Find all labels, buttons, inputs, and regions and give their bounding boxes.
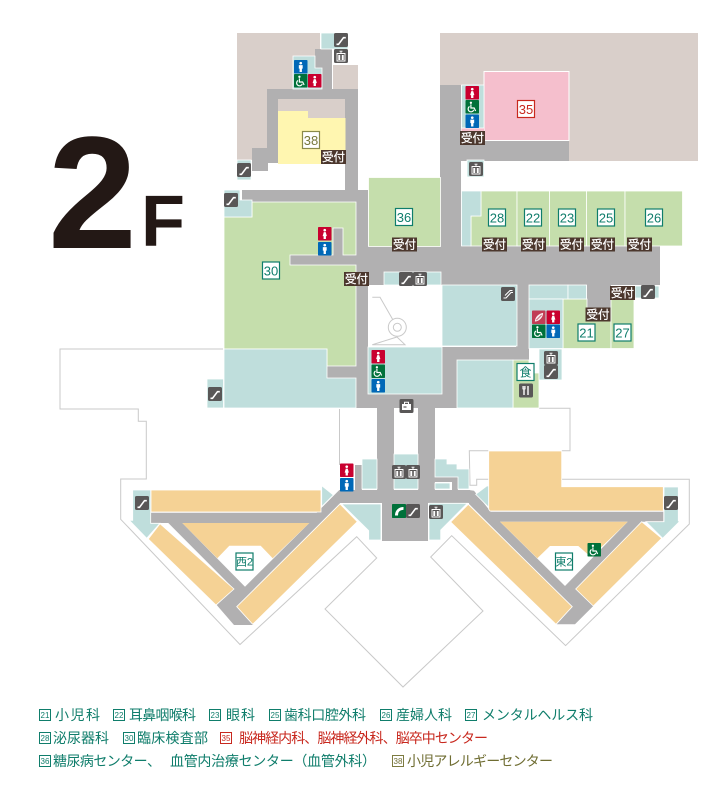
department number boxes: 25 xyxy=(599,210,613,226)
reception labels xyxy=(321,131,652,322)
icons: elevators xyxy=(334,49,558,519)
legend 36 xyxy=(40,753,376,769)
department number boxes: 食 xyxy=(519,366,532,380)
legend 21: 小児科 xyxy=(55,707,100,723)
legend 25: 25 xyxy=(271,711,280,720)
reception labels: 受付 xyxy=(591,238,614,252)
icons: restrooms xyxy=(294,60,601,556)
reception labels: 受付 xyxy=(483,238,506,252)
department number boxes: 21 xyxy=(579,326,594,340)
reception labels: 受付 xyxy=(345,273,368,286)
legend 25: 歯科口腔外科 xyxy=(284,707,366,723)
legend row 3 xyxy=(40,753,553,769)
title: 2F: 2 xyxy=(48,103,137,282)
triangles inside the wards xyxy=(182,522,628,587)
department number boxes: 38 xyxy=(304,133,318,148)
legend 38: 38 xyxy=(394,757,403,766)
reception labels: 受付 xyxy=(611,287,634,300)
department number boxes: 35 xyxy=(519,102,533,117)
department number boxes: 30 xyxy=(264,264,278,278)
legend 26: 26 xyxy=(382,711,391,720)
icon: telephone xyxy=(392,504,406,518)
legend xyxy=(40,707,593,769)
reception labels: 受付 xyxy=(628,238,651,252)
legend 23: 23 xyxy=(211,711,220,720)
department number boxes: 28 xyxy=(490,210,504,226)
department number boxes: 東2 xyxy=(555,556,573,568)
reception labels: 受付 xyxy=(522,238,545,252)
legend 22: 22 xyxy=(115,711,124,720)
icon: restaurant cutlery xyxy=(519,384,533,398)
room 38: yellow xyxy=(278,111,346,164)
reception labels: 受付 xyxy=(586,308,610,322)
legend 27: 27 xyxy=(467,711,476,720)
department number boxes: 36 xyxy=(397,210,411,225)
department number boxes: 26 xyxy=(647,210,661,226)
title: 2F xyxy=(48,103,185,282)
icons: escalators xyxy=(135,33,678,518)
east ward xyxy=(451,451,663,624)
department number boxes xyxy=(236,100,662,570)
department number boxes: 27 xyxy=(615,326,630,340)
department number boxes: 23 xyxy=(560,210,574,226)
legend row 2 xyxy=(40,730,488,746)
legend 36: 糖尿病センター、 xyxy=(53,753,161,769)
legend 21: 21 xyxy=(41,711,50,720)
building outline xyxy=(60,349,689,687)
department number boxes: 22 xyxy=(526,210,540,226)
service rooms: teal xyxy=(129,33,680,540)
department number boxes: 西2 xyxy=(236,556,253,568)
corridors xyxy=(151,49,663,625)
title: 2F: F xyxy=(141,182,185,262)
legend 23 xyxy=(210,707,255,723)
escalator outline xyxy=(372,297,406,345)
legend row 1 xyxy=(40,707,593,723)
taupe unused areas xyxy=(237,33,698,161)
west ward xyxy=(148,490,357,624)
pink strip below restroom xyxy=(462,128,484,133)
legend 36: 血管内治療センター（血管外科） xyxy=(170,753,376,769)
legend 28: 28 xyxy=(41,734,50,743)
legend 30: 30 xyxy=(125,734,134,743)
legend 38: 小児アレルギーセンター xyxy=(407,753,553,769)
legend 35: 脳神経内科、脳神経外科、脳卒中センター xyxy=(239,730,488,746)
reception labels: 受付 xyxy=(322,151,345,164)
legend 23: 眼科 xyxy=(226,707,255,723)
reception labels: 受付 xyxy=(560,238,583,252)
legend 26: 産婦人科 xyxy=(396,707,452,723)
legend 27: メンタルヘルス科 xyxy=(482,707,593,723)
clinic rooms: green xyxy=(224,178,682,408)
legend 35: 35 xyxy=(222,734,231,743)
icon: briefcase xyxy=(400,399,414,413)
legend 30: 臨床検査部 xyxy=(137,730,208,746)
room 35: pink xyxy=(484,72,569,140)
legend 28: 泌尿器科 xyxy=(53,730,109,746)
legend 36: 36 xyxy=(41,757,50,766)
reception labels: 受付 xyxy=(393,238,416,252)
legend 22: 耳鼻咽喉科 xyxy=(129,707,196,723)
reception labels: 受付 xyxy=(461,132,484,145)
